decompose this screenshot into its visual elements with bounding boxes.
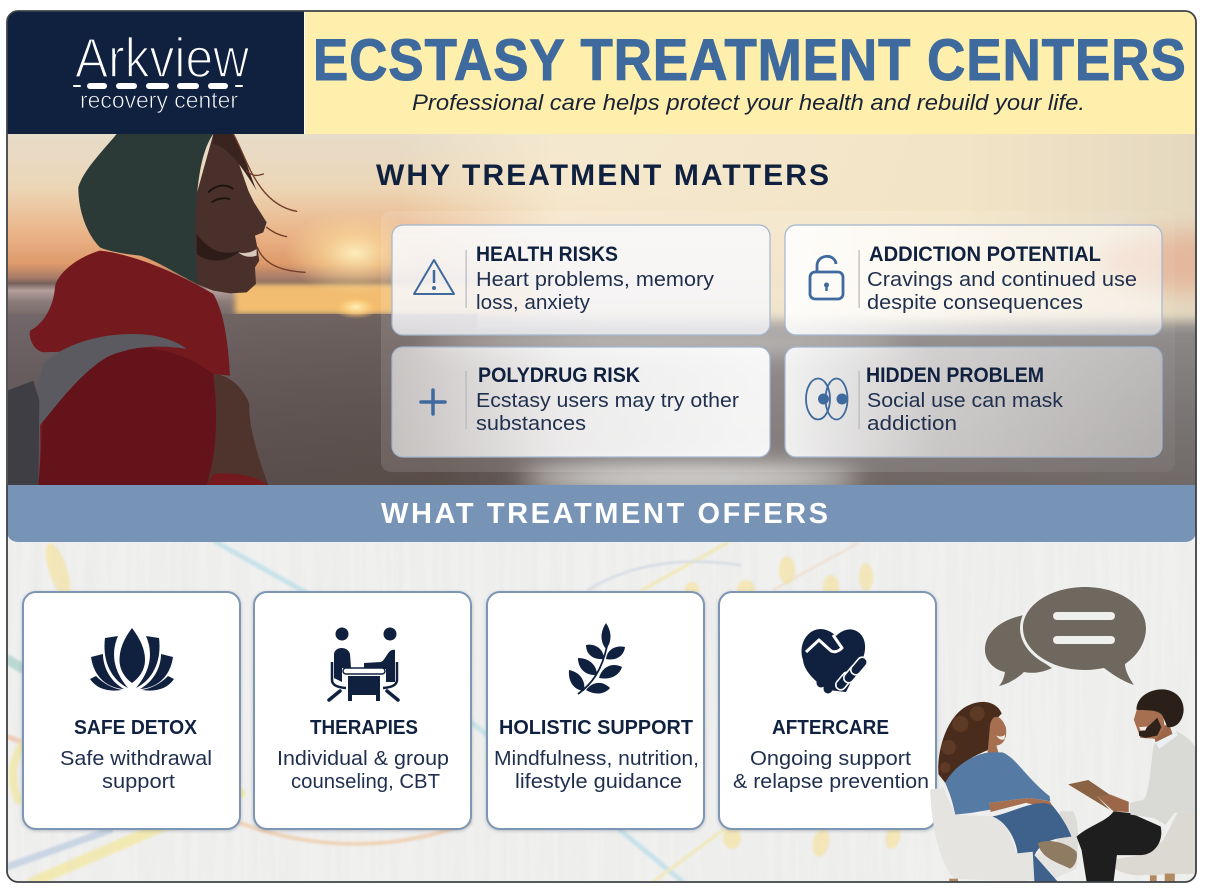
text: polydrug risk: Ecstasy users may try other — [476, 390, 739, 412]
card: aftercare — [719, 592, 936, 829]
illustration: counselor and client seated — [930, 689, 1198, 883]
backpack strap — [37, 334, 187, 427]
text: hidden problem: addiction — [867, 413, 957, 435]
text: safe detox — [60, 716, 212, 793]
text: aftercare — [733, 716, 929, 793]
callout backing plate — [381, 211, 1175, 472]
text: polydrug risk: POLYDRUG RISK — [478, 364, 640, 387]
text: hidden problem: HIDDEN PROBLEM — [866, 364, 1044, 387]
icon: plant sprig — [569, 623, 625, 694]
text: hidden problem: Social use can mask — [867, 390, 1064, 412]
heading: why treatment matters: WHY TREATMENT MATTERS — [376, 159, 829, 192]
panel: title banner — [305, 11, 1196, 134]
text: therapies: THERAPIES — [310, 716, 418, 739]
logo divider dashes — [73, 83, 243, 89]
icon: plus — [421, 390, 445, 414]
icon: speech bubbles — [985, 587, 1146, 686]
client chair — [930, 788, 1078, 883]
text: aftercare: Ongoing support — [750, 748, 911, 770]
card: polydrug risk — [392, 347, 770, 457]
text: aftercare: & relapse prevention — [733, 771, 929, 793]
text: health risks: Heart problems, memory — [476, 269, 714, 291]
client shoe — [1038, 841, 1077, 869]
icon: handshake heart — [802, 629, 869, 694]
text: health risks: loss, anxiety — [476, 292, 590, 314]
text: health risks: HEALTH RISKS — [476, 243, 618, 266]
text: aftercare: AFTERCARE — [772, 716, 889, 739]
heading: what treatment offers: WHAT TREATMENT OFFERS — [381, 498, 828, 530]
panel: lower section background — [7, 520, 1196, 882]
card: hidden problem — [785, 347, 1162, 457]
text: addiction potential: ADDICTION POTENTIAL — [869, 243, 1101, 266]
icon: eyes — [806, 378, 848, 420]
icon: warning triangle — [414, 260, 454, 294]
panel: photo section with sunset — [7, 134, 1205, 512]
text: safe detox: support — [102, 771, 175, 793]
text: polydrug risk — [476, 364, 739, 435]
card: health risks — [392, 225, 770, 335]
text: therapies — [277, 716, 449, 793]
client woman — [938, 702, 1071, 882]
text: polydrug risk: substances — [476, 413, 586, 435]
text: health risks — [476, 243, 714, 314]
card: addiction potential — [785, 225, 1162, 335]
text: holistic support — [494, 716, 699, 793]
text: safe detox: Safe withdrawal — [60, 748, 212, 770]
text: hidden problem — [866, 364, 1064, 435]
icon: open padlock — [810, 256, 843, 299]
subtitle: Professional care helps protect your health and rebuild your life. — [412, 90, 1085, 115]
face — [193, 134, 267, 293]
icon: lotus — [90, 628, 174, 691]
logo wordmark: Arkview — [75, 26, 249, 89]
card: safe detox — [23, 592, 240, 829]
text: therapies: counseling, CBT — [291, 771, 440, 793]
logo subtitle: recovery center — [80, 87, 238, 113]
text: addiction potential — [867, 243, 1137, 314]
title: ECSTASY TREATMENT CENTERS — [313, 28, 1186, 93]
photo: woman in hood and red jacket — [7, 134, 305, 485]
text: holistic support: Mindfulness, nutrition, — [494, 748, 699, 770]
text: addiction potential: despite consequences — [867, 292, 1083, 314]
text: holistic support: HOLISTIC SUPPORT — [499, 716, 693, 739]
text: safe detox: SAFE DETOX — [74, 716, 197, 739]
card: therapies — [254, 592, 471, 829]
counselor chair — [1109, 811, 1198, 883]
card: holistic support — [487, 592, 704, 829]
counselor man — [1068, 689, 1198, 882]
text: holistic support: lifestyle guidance — [515, 771, 682, 793]
jacket — [30, 251, 230, 485]
panel: logo block — [7, 10, 304, 134]
icon: two people at table — [329, 628, 398, 701]
text: therapies: Individual & group — [277, 748, 449, 770]
panel: what treatment offers band — [7, 485, 1196, 542]
hand — [207, 374, 268, 485]
text: addiction potential: Cravings and continued use — [867, 269, 1137, 291]
